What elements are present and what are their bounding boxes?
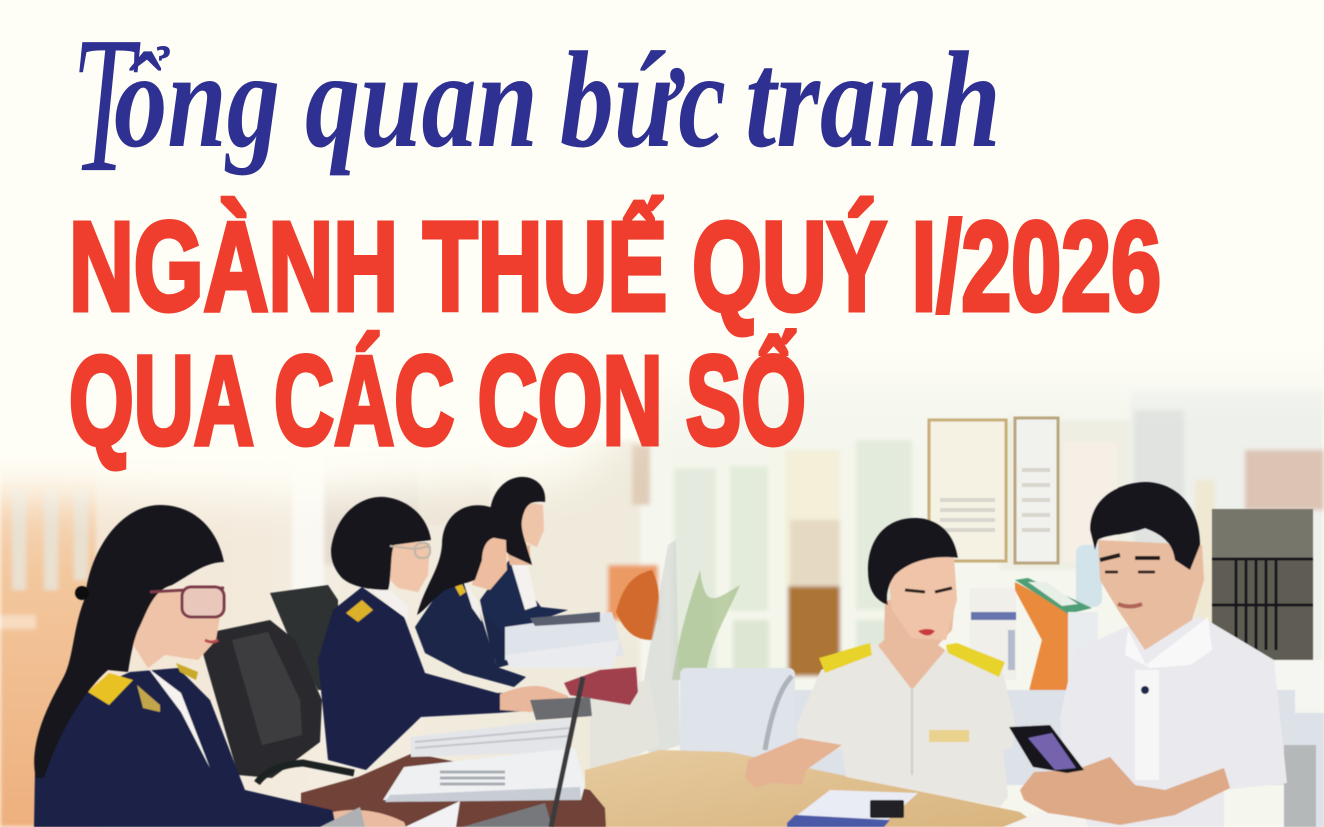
title: script line: T <box>72 0 141 213</box>
person: back officer <box>480 477 568 660</box>
title: script line: tranh <box>745 23 1001 176</box>
dark gated window <box>1212 509 1324 710</box>
document stacks <box>383 612 624 802</box>
laptop <box>462 677 583 827</box>
plant behind glass <box>616 570 740 680</box>
glass screen <box>636 540 680 755</box>
title: script line: ổng <box>114 23 280 176</box>
glass stand on desk <box>590 680 660 775</box>
photo: top fade overlay <box>0 0 1324 498</box>
wall notice boards <box>929 418 1117 563</box>
phone on desk <box>564 667 638 705</box>
counter: tan desk <box>585 750 1040 827</box>
person: front officer <box>34 505 460 827</box>
front chair <box>202 620 354 783</box>
person: female tax officer in white <box>745 518 1016 807</box>
keyboard <box>530 697 592 720</box>
leaflet on counter <box>787 790 918 827</box>
counter: dark desk <box>301 753 606 827</box>
information sign <box>970 588 1016 680</box>
photo scene <box>34 418 1324 827</box>
title: script line: bức <box>560 23 726 176</box>
water cooler jug <box>1076 545 1102 607</box>
person: third officer <box>415 505 570 687</box>
back chair <box>270 585 338 690</box>
title: script line: quan <box>305 23 538 176</box>
person: male taxpayer <box>1009 482 1287 827</box>
person: second officer <box>318 497 568 770</box>
waiting bench <box>680 668 1324 827</box>
paper on counter <box>1003 812 1130 827</box>
title: second red line: QUA CÁC CON SỐ <box>69 330 806 471</box>
photo: office background <box>0 330 1324 827</box>
orange kiosk <box>1015 578 1098 695</box>
